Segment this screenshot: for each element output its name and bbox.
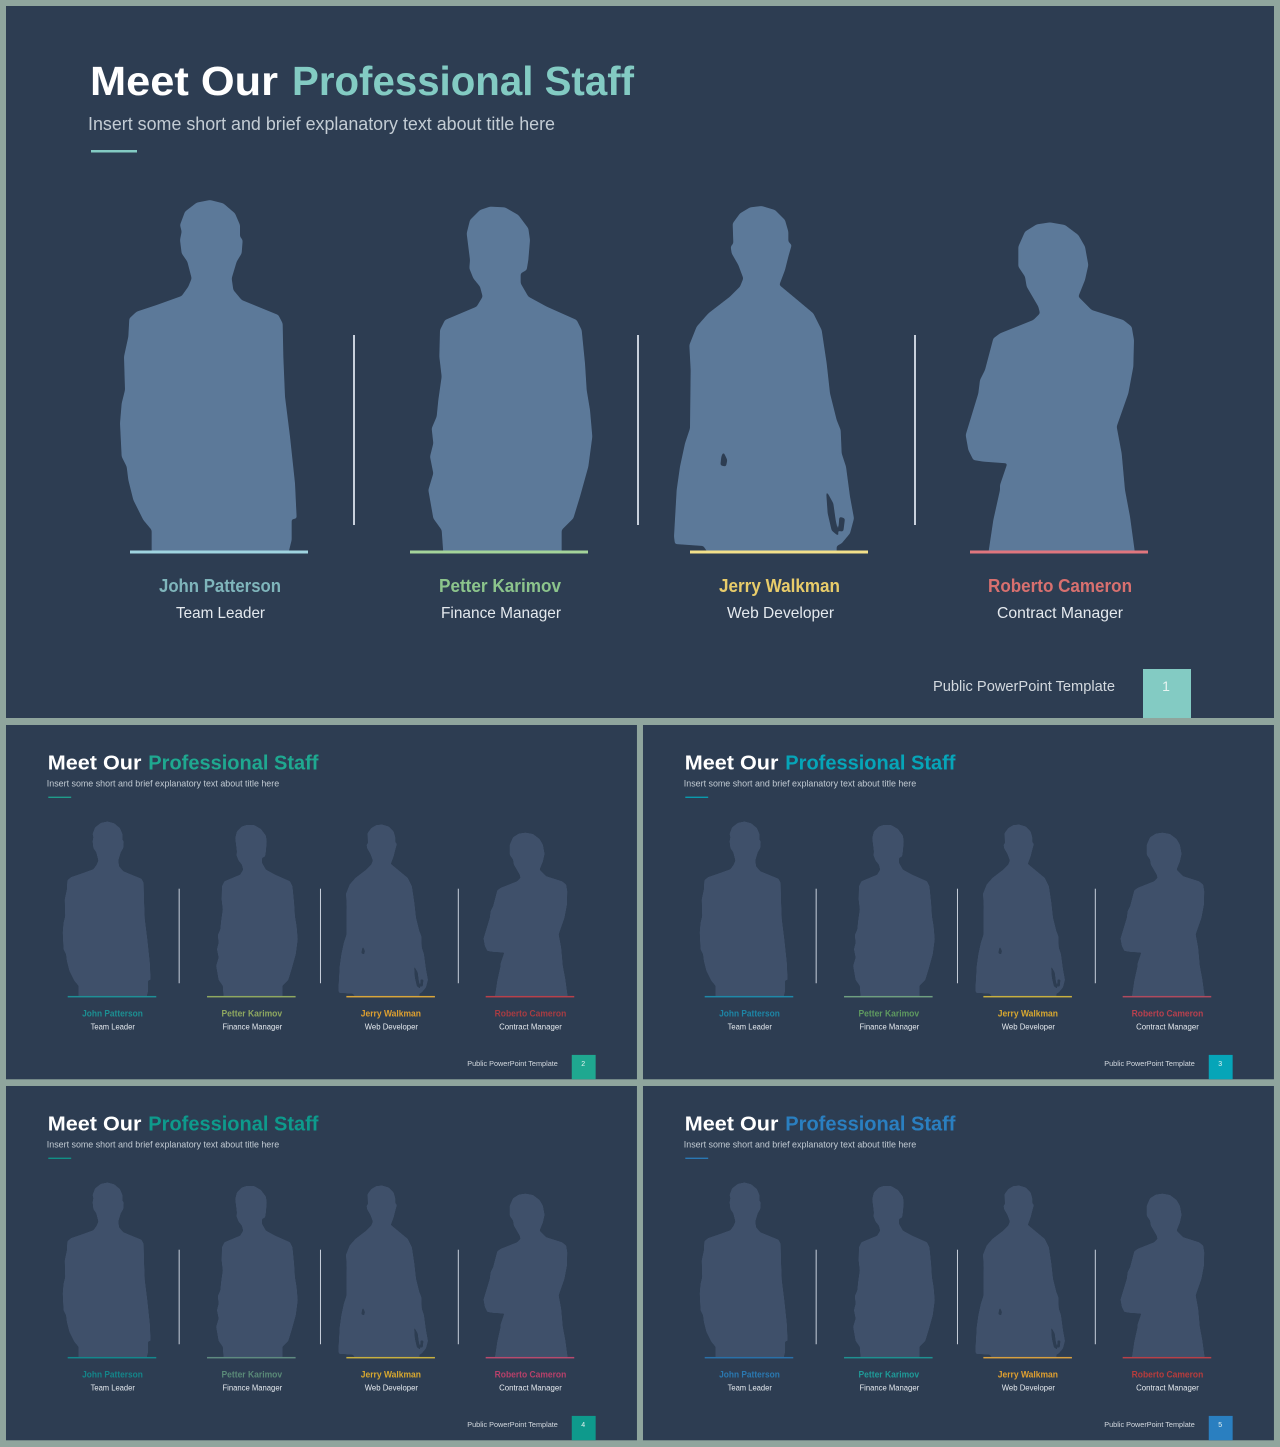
silhouette: Jerry Walkman xyxy=(975,825,1065,997)
name and role: Petter Karimov xyxy=(221,1370,282,1393)
title xyxy=(685,1113,956,1135)
underline: Roberto xyxy=(486,996,574,997)
underline: Jerry xyxy=(346,996,435,997)
name and role: Roberto Cameron: Roberto Cameron xyxy=(1132,1009,1203,1019)
name and role: Jerry Walkman: Jerry Walkman xyxy=(719,576,840,596)
name and role: John Patterson: John Patterson xyxy=(82,1009,143,1019)
title: Meet Our xyxy=(90,58,278,104)
page number badge xyxy=(1143,669,1191,718)
name and role: John Patterson: Team Leader xyxy=(91,1023,135,1032)
title xyxy=(48,1113,319,1135)
page number badge xyxy=(1209,1416,1233,1440)
name and role: John Patterson: John Patterson xyxy=(159,576,281,596)
footer text: Public PowerPoint Template xyxy=(1104,1059,1195,1068)
name and role: Jerry Walkman: Jerry Walkman xyxy=(361,1370,421,1380)
silhouette: Jerry Walkman xyxy=(338,1186,428,1358)
underline: Petter xyxy=(207,1357,296,1358)
underline: John xyxy=(68,1357,156,1358)
silhouette: Jerry Walkman xyxy=(975,1186,1065,1358)
underline: John xyxy=(68,996,156,997)
silhouette: John Patterson xyxy=(700,822,788,997)
underline: Jerry xyxy=(346,1357,435,1358)
name and role: John Patterson: John Patterson xyxy=(719,1009,780,1019)
footer text: Public PowerPoint Template xyxy=(1104,1420,1195,1429)
name and role: John Patterson: Team Leader xyxy=(91,1384,135,1393)
underline: Jerry xyxy=(690,550,868,554)
silhouette: Petter Karimov xyxy=(216,825,298,997)
name and role: Jerry Walkman xyxy=(719,576,840,622)
panel: slide 4 xyxy=(6,1086,637,1440)
panel: slide 2 xyxy=(6,725,637,1079)
title accent line xyxy=(91,150,137,152)
silhouette: Petter Karimov xyxy=(853,825,935,997)
title accent line xyxy=(685,1158,708,1159)
silhouette: Roberto Cameron xyxy=(484,1194,568,1358)
title: Professional Staff xyxy=(785,1113,956,1135)
underline: Jerry xyxy=(983,1357,1072,1358)
name and role: John Patterson: John Patterson xyxy=(82,1370,143,1380)
page number badge xyxy=(1209,1055,1233,1079)
page number badge xyxy=(572,1055,596,1079)
name and role: John Patterson xyxy=(82,1370,143,1393)
underline: Petter xyxy=(844,996,933,997)
name and role: Petter Karimov: Finance Manager xyxy=(222,1384,282,1393)
name and role: John Patterson xyxy=(159,576,281,622)
silhouette: Petter Karimov xyxy=(216,1186,298,1358)
underline: Roberto xyxy=(486,1357,574,1358)
underline: John xyxy=(130,550,308,554)
name and role: Roberto Cameron xyxy=(1132,1370,1203,1393)
name and role: Roberto Cameron xyxy=(988,576,1132,622)
name and role: Jerry Walkman: Web Developer xyxy=(727,605,835,622)
silhouette: Petter Karimov xyxy=(853,1186,935,1358)
name and role: Petter Karimov xyxy=(858,1009,919,1032)
silhouette: Roberto Cameron xyxy=(1121,833,1205,997)
name and role: Petter Karimov xyxy=(221,1009,282,1032)
name and role: Roberto Cameron: Contract Manager xyxy=(1136,1384,1199,1393)
name and role: Roberto Cameron: Roberto Cameron xyxy=(988,576,1132,596)
title xyxy=(685,752,956,774)
page number badge: 5 xyxy=(1218,1422,1222,1429)
subtitle: Insert some short and brief explanatory text about title here xyxy=(684,779,916,789)
name and role: Jerry Walkman: Jerry Walkman xyxy=(361,1009,421,1019)
name and role: John Patterson: Team Leader xyxy=(176,605,266,622)
name and role: Roberto Cameron: Roberto Cameron xyxy=(1132,1370,1203,1380)
silhouette: Roberto Cameron xyxy=(1121,1194,1205,1358)
name and role: Jerry Walkman: Web Developer xyxy=(365,1023,418,1032)
title accent line xyxy=(685,797,708,798)
title: Professional Staff xyxy=(148,752,319,774)
title xyxy=(48,752,319,774)
name and role: Roberto Cameron: Roberto Cameron xyxy=(495,1009,566,1019)
subtitle: Insert some short and brief explanatory text about title here xyxy=(88,114,555,134)
panel: slide 3 xyxy=(643,725,1274,1079)
name and role: John Patterson: Team Leader xyxy=(728,1023,772,1032)
title accent line xyxy=(48,1158,71,1159)
title accent line xyxy=(48,797,71,798)
name and role: Petter Karimov: Finance Manager xyxy=(222,1023,282,1032)
panel: slide 5 xyxy=(643,1086,1274,1440)
underline: John xyxy=(705,1357,793,1358)
page number badge xyxy=(572,1416,596,1440)
name and role: Jerry Walkman xyxy=(998,1370,1058,1393)
subtitle: Insert some short and brief explanatory text about title here xyxy=(47,779,279,789)
silhouette: Jerry Walkman xyxy=(338,825,428,997)
name and role: Jerry Walkman: Web Developer xyxy=(1002,1384,1055,1393)
title: Professional Staff xyxy=(785,752,956,774)
silhouette: Roberto Cameron xyxy=(966,222,1135,553)
name and role: Roberto Cameron: Contract Manager xyxy=(499,1023,562,1032)
title: Meet Our xyxy=(48,1113,141,1135)
name and role: Petter Karimov: Finance Manager xyxy=(441,605,562,622)
name and role: Roberto Cameron xyxy=(495,1009,566,1032)
name and role: Roberto Cameron: Roberto Cameron xyxy=(495,1370,566,1380)
name and role: John Patterson: Team Leader xyxy=(728,1384,772,1393)
underline: Petter xyxy=(207,996,296,997)
name and role: Petter Karimov: Petter Karimov xyxy=(858,1370,919,1380)
name and role: Jerry Walkman xyxy=(361,1009,421,1032)
subtitle: Insert some short and brief explanatory text about title here xyxy=(47,1140,279,1150)
silhouette: John Patterson xyxy=(63,1183,151,1358)
name and role: Jerry Walkman: Jerry Walkman xyxy=(998,1009,1058,1019)
name and role: Petter Karimov: Petter Karimov xyxy=(221,1370,282,1380)
title: Professional Staff xyxy=(292,58,634,104)
name and role: Roberto Cameron xyxy=(1132,1009,1203,1032)
footer text: Public PowerPoint Template xyxy=(467,1059,558,1068)
footer text: Public PowerPoint Template xyxy=(467,1420,558,1429)
name and role: Jerry Walkman xyxy=(361,1370,421,1393)
panel: main slide 1 xyxy=(6,6,1274,718)
name and role: Petter Karimov xyxy=(439,576,562,622)
name and role: Roberto Cameron: Contract Manager xyxy=(1136,1023,1199,1032)
silhouette: Jerry Walkman xyxy=(674,206,854,553)
underline: Petter xyxy=(844,1357,933,1358)
name and role: John Patterson xyxy=(719,1009,780,1032)
name and role: Petter Karimov: Petter Karimov xyxy=(439,576,561,596)
silhouette: John Patterson xyxy=(120,200,297,553)
title: Meet Our xyxy=(685,752,778,774)
name and role: Jerry Walkman: Web Developer xyxy=(365,1384,418,1393)
name and role: Petter Karimov: Finance Manager xyxy=(859,1023,919,1032)
name and role: Roberto Cameron xyxy=(495,1370,566,1393)
underline: Petter xyxy=(410,550,588,554)
underline: Jerry xyxy=(983,996,1072,997)
title: Professional Staff xyxy=(148,1113,319,1135)
subtitle: Insert some short and brief explanatory text about title here xyxy=(684,1140,916,1150)
name and role: Jerry Walkman: Jerry Walkman xyxy=(998,1370,1058,1380)
page number badge: 2 xyxy=(581,1061,585,1068)
underline: Roberto xyxy=(1123,996,1211,997)
page number badge: 3 xyxy=(1218,1061,1222,1068)
footer text: Public PowerPoint Template xyxy=(933,678,1115,695)
page number badge: 1 xyxy=(1162,678,1170,694)
name and role: Petter Karimov xyxy=(858,1370,919,1393)
name and role: John Patterson xyxy=(719,1370,780,1393)
underline: John xyxy=(705,996,793,997)
name and role: Jerry Walkman: Web Developer xyxy=(1002,1023,1055,1032)
name and role: Roberto Cameron: Contract Manager xyxy=(499,1384,562,1393)
page number badge: 4 xyxy=(581,1422,585,1429)
name and role: John Patterson xyxy=(82,1009,143,1032)
silhouette: Petter Karimov xyxy=(428,207,592,553)
name and role: Jerry Walkman xyxy=(998,1009,1058,1032)
underline: Roberto xyxy=(970,550,1148,554)
name and role: Petter Karimov: Finance Manager xyxy=(859,1384,919,1393)
name and role: Petter Karimov: Petter Karimov xyxy=(858,1009,919,1019)
silhouette: Roberto Cameron xyxy=(484,833,568,997)
name and role: John Patterson: John Patterson xyxy=(719,1370,780,1380)
title: Meet Our xyxy=(48,752,141,774)
name and role: Roberto Cameron: Contract Manager xyxy=(997,605,1124,622)
underline: Roberto xyxy=(1123,1357,1211,1358)
name and role: Petter Karimov: Petter Karimov xyxy=(221,1009,282,1019)
title: Meet Our xyxy=(685,1113,778,1135)
title xyxy=(90,58,634,104)
silhouette: John Patterson xyxy=(63,822,151,997)
silhouette: John Patterson xyxy=(700,1183,788,1358)
